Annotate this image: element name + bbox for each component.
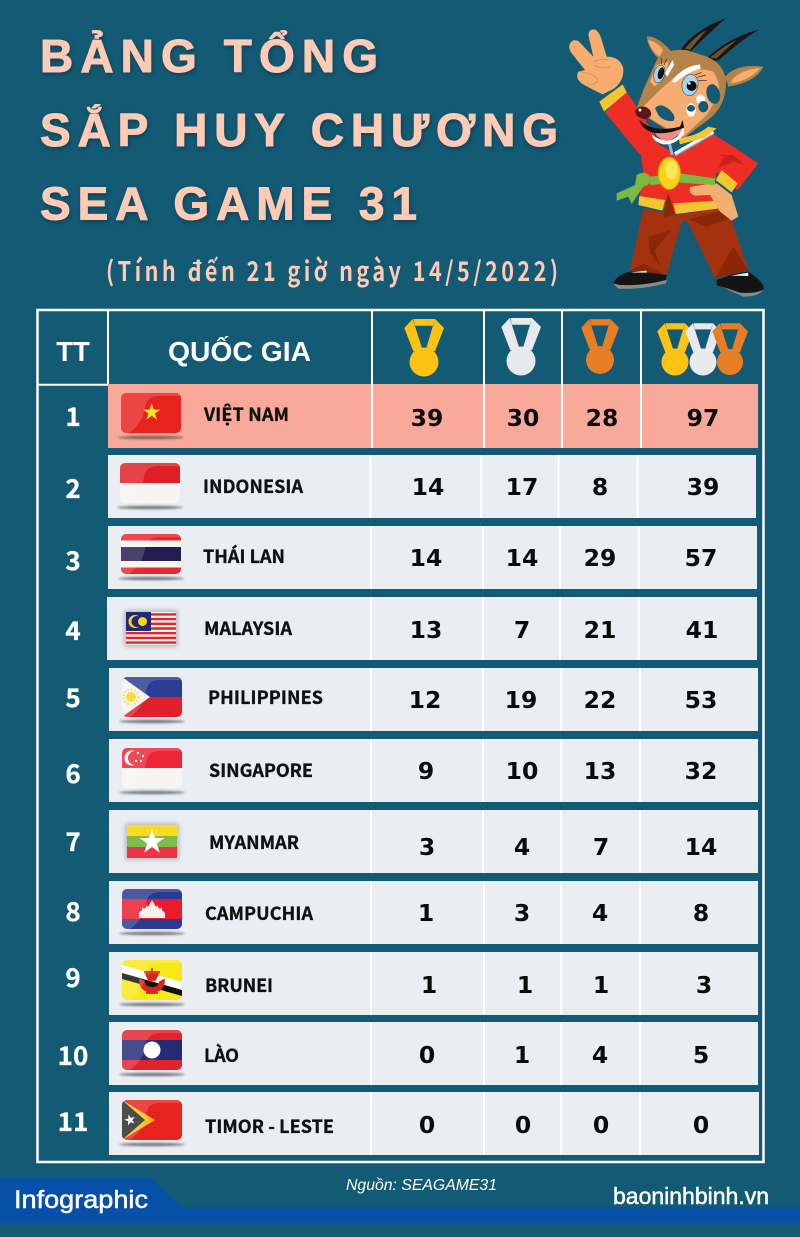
row 5: Philippines (65, 668, 758, 731)
row 9: Brunei: 1 (593, 971, 609, 999)
icon: total medals (657, 323, 748, 376)
row 9: Brunei: BRUNEI (205, 972, 273, 998)
row 6: Singapore: 6 (65, 754, 81, 791)
row 5: Philippines: 5 (65, 678, 81, 715)
row 1: Việt Nam: 1 (65, 397, 81, 434)
row 3: Thái Lan: THÁI LAN (203, 543, 285, 569)
row 7: Myanmar: 7 (65, 822, 81, 859)
row 9: Brunei: 3 (696, 971, 712, 999)
title: SẮP HUY CHƯƠNG (40, 104, 558, 156)
row 6: Singapore: 13 (584, 757, 616, 785)
row 6: Singapore: 9 (418, 757, 434, 785)
row 4: Malaysia: MALAYSIA (204, 615, 292, 641)
mascot body (613, 128, 764, 297)
row 3: Thái Lan: 57 (685, 544, 717, 572)
flag: Myanmar (125, 823, 179, 860)
subtitle: date: (Tính đến 21 giờ ngày 14/5/2022) (106, 251, 558, 290)
row 10: Lào: 4 (592, 1041, 608, 1069)
row 11: Timor - Leste: 11 (58, 1102, 88, 1139)
flag: Việt Nam (118, 393, 184, 439)
row 7: Myanmar: 3 (419, 833, 435, 861)
row 11: Timor - Leste: 0 (693, 1111, 709, 1139)
row 1: Việt Nam: VIỆT NAM (203, 401, 289, 427)
title: BẢNG TỔNG (40, 30, 378, 82)
header: rank: TT (56, 336, 90, 367)
row 8: Campuchia: 8 (693, 899, 709, 927)
row 2: Indonesia: 17 (506, 473, 538, 501)
row 7: Myanmar: 7 (593, 833, 609, 861)
row 5: Philippines: PHILIPPINES (208, 684, 323, 710)
icon: silver medal (501, 318, 541, 376)
row 5: Philippines: 22 (584, 686, 616, 714)
row 5: Philippines: 12 (409, 686, 441, 714)
mascot: Sao La with gold medal (569, 18, 764, 297)
row 3: Thái Lan: 29 (584, 544, 616, 572)
row 5: Philippines: 19 (505, 686, 537, 714)
row 10: Lào: 0 (419, 1041, 435, 1069)
row 6: Singapore: SINGAPORE (209, 757, 313, 783)
medal table (38, 310, 764, 1162)
footer band (0, 1178, 800, 1223)
row 3: Thái Lan: 14 (506, 544, 538, 572)
row 10: Lào: LÀO (204, 1042, 239, 1068)
row 8: Campuchia: 8 (65, 892, 81, 929)
flag: Thái Lan (118, 534, 184, 580)
row 4: Malaysia: 4 (65, 611, 81, 648)
row 2: Indonesia: 14 (412, 473, 444, 501)
row 2: Indonesia: 8 (592, 473, 608, 501)
row 11: Timor - Leste (58, 1092, 759, 1155)
title: SEA GAME 31 (40, 178, 417, 230)
source note: Nguồn: SEAGAME31 (346, 1177, 497, 1194)
row 3: Thái Lan: 3 (65, 541, 81, 578)
row 10: Lào (58, 1022, 758, 1085)
row 7: Myanmar: 14 (685, 833, 717, 861)
row 6: Singapore (65, 739, 758, 802)
row 9: Brunei (65, 952, 758, 1015)
row 4: Malaysia: 13 (410, 616, 442, 644)
mascot head and raised arm (569, 18, 763, 155)
flag: Singapore (119, 748, 185, 794)
header: country: QUỐC GIA (168, 335, 311, 367)
row 7: Myanmar: 4 (514, 833, 530, 861)
icon: bronze medal (581, 319, 619, 374)
row 10: Lào: 1 (514, 1041, 530, 1069)
flag: Campuchia (119, 889, 185, 935)
row 3: Thái Lan (65, 526, 757, 589)
table frame (38, 310, 764, 1162)
row 1: Việt Nam: 97 (687, 404, 719, 432)
row 9: Brunei: 9 (65, 958, 81, 995)
row 6: Singapore: 32 (685, 757, 717, 785)
flag: Timor - Leste (119, 1100, 185, 1146)
flag: Indonesia (117, 463, 183, 509)
row 11: Timor - Leste: 0 (515, 1111, 531, 1139)
row 1: Việt Nam: 28 (586, 404, 618, 432)
row 7: Myanmar (65, 810, 758, 873)
row 4: Malaysia: 7 (514, 616, 530, 644)
table header row (38, 310, 748, 385)
row 4: Malaysia: 41 (686, 616, 718, 644)
flag: Philippines (119, 677, 185, 723)
row 11: Timor - Leste: TIMOR - LESTE (205, 1113, 334, 1139)
website: baoninhbinh.vn (613, 1183, 769, 1209)
footer label: Infographic: Infographic (14, 1186, 148, 1214)
row 3: Thái Lan: 14 (410, 544, 442, 572)
row 9: Brunei: 1 (517, 971, 533, 999)
flag: Malaysia (124, 610, 178, 647)
flag: Brunei (119, 960, 185, 1006)
row 11: Timor - Leste: 0 (593, 1111, 609, 1139)
row 5: Philippines: 53 (685, 686, 717, 714)
row 8: Campuchia: 4 (592, 899, 608, 927)
row 7: Myanmar: MYANMAR (209, 829, 299, 855)
row 8: Campuchia (65, 881, 758, 944)
row 6: Singapore: 10 (506, 757, 538, 785)
row 4: Malaysia (65, 597, 757, 660)
row 8: Campuchia: CAMPUCHIA (205, 900, 313, 926)
row 1: Việt Nam: 39 (411, 404, 443, 432)
row 10: Lào: 5 (693, 1041, 709, 1069)
row 1: Việt Nam (65, 384, 758, 448)
title (40, 30, 558, 230)
row 2: Indonesia: INDONESIA (203, 473, 303, 499)
row 8: Campuchia: 1 (418, 899, 434, 927)
flag: Lào (119, 1030, 185, 1076)
row 2: Indonesia: 2 (65, 469, 81, 506)
row 9: Brunei: 1 (421, 971, 437, 999)
row 2: Indonesia (65, 455, 756, 518)
row 4: Malaysia: 21 (584, 616, 616, 644)
row 10: Lào: 10 (58, 1036, 88, 1073)
row 8: Campuchia: 3 (514, 899, 530, 927)
row 11: Timor - Leste: 0 (419, 1111, 435, 1139)
row 1: Việt Nam: 30 (507, 404, 539, 432)
icon: gold medal (404, 319, 444, 376)
row 2: Indonesia: 39 (687, 473, 719, 501)
